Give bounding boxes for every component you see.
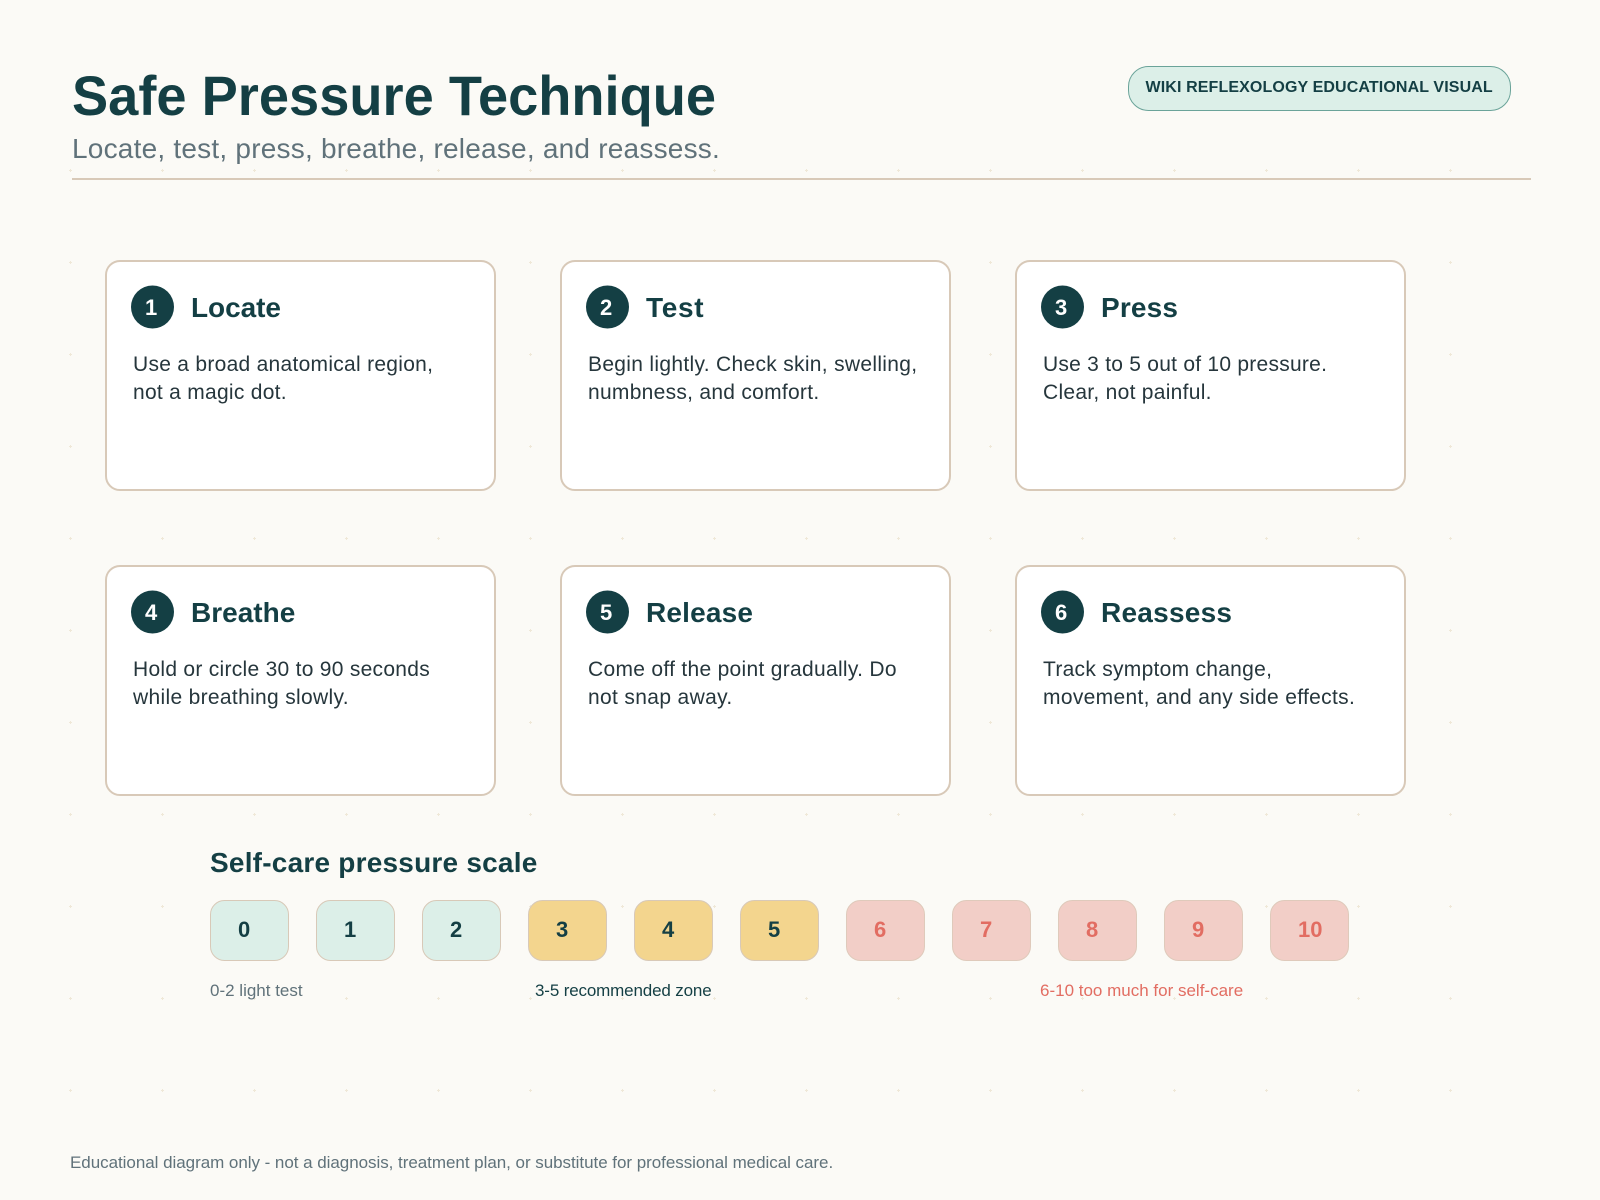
chip 3 bbox=[528, 900, 606, 960]
panel: step 3 press: Press bbox=[1101, 292, 1178, 323]
chip 1: 1 bbox=[344, 917, 356, 942]
chip 10: 10 bbox=[1298, 917, 1322, 942]
scale label: recommended zone: 3-5 recommended zone bbox=[535, 981, 712, 1000]
chip 8 bbox=[1058, 900, 1136, 960]
panel: step 5 release bbox=[561, 566, 950, 795]
chip 1 bbox=[316, 900, 394, 960]
panel: step 4 breathe: Hold or circle 30 to 90 seconds bbox=[133, 658, 430, 681]
panel: step 2 test: Begin lightly. Check skin, swelling, bbox=[588, 353, 917, 376]
panel: step 5 release: not snap away. bbox=[588, 686, 733, 709]
panel: step 3 press bbox=[1016, 261, 1405, 490]
chip 4 bbox=[634, 900, 712, 960]
panel: step 4 breathe: Breathe bbox=[191, 597, 295, 628]
chip 5 bbox=[740, 900, 818, 960]
chip 4: 4 bbox=[662, 917, 675, 942]
panel: step 3 press: 3 bbox=[1055, 295, 1067, 320]
panel: step 6 reassess: 6 bbox=[1055, 600, 1067, 625]
panel: step 1 locate: Use a broad anatomical region, bbox=[133, 353, 433, 376]
panel: step 1 locate: not a magic dot. bbox=[133, 381, 287, 404]
panel: step 3 press: Use 3 to 5 out of 10 pressure. bbox=[1043, 353, 1327, 376]
panel: step 5 release: Come off the point gradually. Do bbox=[588, 658, 897, 681]
chip 10 bbox=[1270, 900, 1348, 960]
panel: step 2 test: numbness, and comfort. bbox=[588, 381, 819, 404]
chip 5: 5 bbox=[768, 917, 780, 942]
panel: step 5 release: 5 bbox=[600, 600, 612, 625]
panel: step 6 reassess bbox=[1016, 566, 1405, 795]
chip 2 bbox=[422, 900, 500, 960]
badge bbox=[1128, 66, 1510, 110]
panel: step 1 locate bbox=[106, 261, 495, 490]
chip 6 bbox=[846, 900, 924, 960]
chip 8: 8 bbox=[1086, 917, 1098, 942]
scale label: light test: 0-2 light test bbox=[210, 981, 303, 1000]
chip 0 bbox=[210, 900, 288, 960]
panel: step 6 reassess: Track symptom change, bbox=[1043, 658, 1272, 681]
panel: step 6 reassess: Reassess bbox=[1101, 597, 1232, 628]
badge: WIKI REFLEXOLOGY EDUCATIONAL VISUAL bbox=[1146, 79, 1493, 96]
panel: step 4 breathe: while breathing slowly. bbox=[132, 686, 349, 709]
pressure scale chips bbox=[210, 900, 1348, 960]
footer disclaimer: Educational diagram only - not a diagnosis, treatment plan, or substitute for professional medical care. bbox=[70, 1153, 833, 1172]
panel: step 1 locate: 1 bbox=[145, 295, 157, 320]
panel: step 3 press: Clear, not painful. bbox=[1043, 381, 1212, 404]
chip 6: 6 bbox=[874, 917, 886, 942]
chip 3: 3 bbox=[556, 917, 568, 942]
chip 7: 7 bbox=[980, 917, 992, 942]
panel: step 2 test: Test bbox=[646, 292, 704, 323]
panel: step 6 reassess: movement, and any side effects. bbox=[1043, 686, 1355, 709]
chip 0: 0 bbox=[238, 917, 250, 942]
subtitle: Locate, test, press, breathe, release, and reassess. bbox=[72, 133, 720, 164]
panel: step 2 test: 2 bbox=[600, 295, 612, 320]
scale label: too much: 6-10 too much for self-care bbox=[1040, 981, 1243, 1000]
chip 9 bbox=[1164, 900, 1242, 960]
title: Safe Pressure Technique bbox=[72, 64, 716, 127]
panel: step 1 locate: Locate bbox=[191, 292, 281, 323]
panel: step 5 release: Release bbox=[646, 597, 753, 628]
panel: step 4 breathe bbox=[106, 566, 495, 795]
heading: pressure scale: Self-care pressure scale bbox=[210, 847, 538, 878]
chip 7 bbox=[952, 900, 1030, 960]
panel: step 4 breathe: 4 bbox=[145, 600, 158, 625]
chip 2: 2 bbox=[450, 917, 462, 942]
panel: step 2 test bbox=[561, 261, 950, 490]
chip 9: 9 bbox=[1192, 917, 1204, 942]
